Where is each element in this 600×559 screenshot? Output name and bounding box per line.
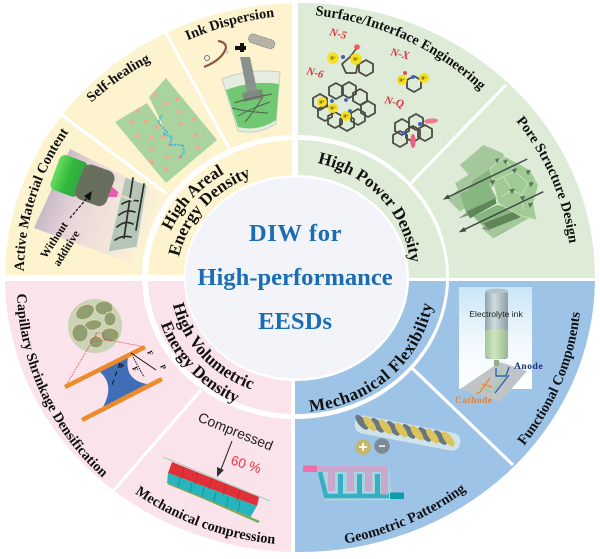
heading: Energy Density (areal): Energy Density xyxy=(168,170,248,257)
panel: high areal energy density outer sectors xyxy=(5,3,292,275)
icon: mechanical compression layers xyxy=(157,409,275,523)
heading: Self-healing: Self-healing xyxy=(86,55,152,102)
icon: pore structure xyxy=(443,145,543,238)
icon: capillary shrinkage diagram: F xyxy=(145,349,155,357)
molecule: N-6: H⁺ xyxy=(330,106,336,110)
icon: syringe printing photo: Without xyxy=(38,220,71,261)
icon: ink dispersion beaker xyxy=(204,33,280,132)
icon: nitrogen-doped carbon structures xyxy=(304,26,438,148)
inner ring: high power density xyxy=(298,140,446,278)
inner ring: high volumetric energy density xyxy=(148,281,291,414)
panel: mechanical flexibility outer sectors xyxy=(295,281,595,552)
molecule: N-6: H⁺ xyxy=(319,100,325,104)
icon: electrolyte ink printing: Anode xyxy=(514,361,543,372)
icon: capillary shrinkage diagram: θ xyxy=(116,362,126,369)
molecule: N-5: H⁺ xyxy=(330,56,336,60)
icon: capillary shrinkage diagram: P xyxy=(158,363,168,371)
heading: Capillary Shrinkage Densification: Capillary Shrinkage Densification xyxy=(15,294,106,478)
sector divider lines xyxy=(62,31,513,490)
label: N-Q: N-Q xyxy=(382,94,405,111)
icon: syringe printing photo: additive xyxy=(51,229,83,269)
molecule: N-Q xyxy=(393,114,438,148)
icon: capillary shrinkage diagram: F xyxy=(130,365,140,373)
icon: interdigitated electrodes xyxy=(303,465,404,501)
icon: electrolyte ink printing: Electrolyte ink xyxy=(469,309,523,319)
icon: self-healing film xyxy=(115,78,217,183)
molecule: N-6 xyxy=(313,82,375,131)
icon: twisted fiber electrodes xyxy=(351,412,462,455)
molecule: N-5: H⁺ xyxy=(353,56,359,62)
heading: High Areal: High Areal xyxy=(161,164,224,231)
heading: Mechanical compression: Mechanical compression xyxy=(135,486,275,544)
heading: Ink Dispersion: Ink Dispersion xyxy=(184,9,274,40)
title: High-performance xyxy=(197,264,393,291)
heading: Pore Structure Design: Pore Structure Design xyxy=(516,115,576,244)
inner ring: high areal energy density xyxy=(148,140,292,275)
heading: Mechanical Flexibility: Mechanical Flexibility xyxy=(308,302,435,412)
label: N-6: N-6 xyxy=(304,65,325,81)
icon: syringe printing photo xyxy=(34,149,167,269)
heading: Geometric Patterning: Geometric Patterning xyxy=(344,484,467,543)
molecule: N-X: H⁺ xyxy=(399,78,405,82)
icon: mechanical compression layers: Compressed xyxy=(196,409,275,454)
title: EESDs xyxy=(258,308,332,335)
heading: High Volumetric: High Volumetric xyxy=(172,302,254,390)
heading: Surface/Interface Engineering: Surface/Interface Engineering xyxy=(316,6,485,92)
panel: high power density outer sectors xyxy=(298,3,595,278)
panel: high volumetric energy density outer sectors xyxy=(5,281,291,552)
molecule: N-5 xyxy=(327,42,373,76)
heading: Energy Density (volumetric): Energy Density xyxy=(160,320,240,404)
inner ring: mechanical flexibility xyxy=(295,281,446,414)
label: N-X: N-X xyxy=(388,46,411,63)
molecule: N-6: H⁺ xyxy=(343,114,349,118)
icon: electrolyte ink printing xyxy=(455,287,543,406)
center circle xyxy=(186,178,406,378)
icon: capillary shrinkage diagram xyxy=(65,299,168,420)
icon: electrolyte ink printing: Cathode xyxy=(455,395,493,406)
label: N-5: N-5 xyxy=(327,26,348,42)
heading: Functional Components: Functional Components xyxy=(516,312,580,446)
title xyxy=(197,220,393,335)
molecule: N-X xyxy=(397,71,429,92)
molecule: N-X: H⁺ xyxy=(421,76,427,80)
title: DIW for xyxy=(249,220,342,247)
heading: Active Material Content: Active Material Content xyxy=(14,128,68,272)
heading: High Power Density: High Power Density xyxy=(318,152,419,262)
icon: mechanical compression layers: 60 % xyxy=(229,453,263,476)
